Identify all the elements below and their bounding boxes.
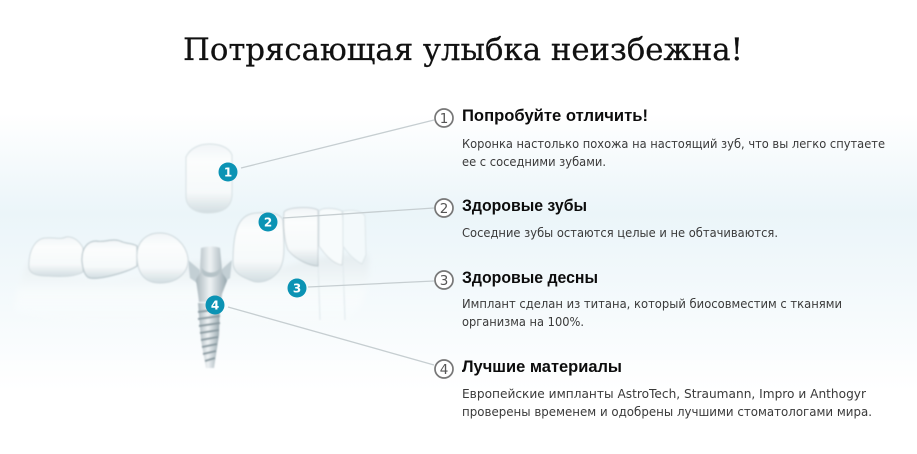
abutment	[196, 246, 227, 302]
item 1: Коронка настолько похожа на настоящий зуб, что вы легко спутаете	[462, 137, 885, 151]
badge 1	[218, 162, 238, 182]
badge 2	[258, 212, 278, 232]
item 2: Соседние зубы остаются целые и не обтачиваются.	[462, 226, 778, 240]
item 4: Лучшие материалы	[462, 358, 622, 376]
leader lines	[228, 120, 434, 365]
molar middle	[82, 240, 137, 278]
item 4: 4	[440, 362, 448, 378]
crown	[186, 144, 232, 213]
badge 2: 2	[264, 216, 272, 230]
gum shadows	[188, 260, 345, 320]
item 2: 2	[440, 201, 448, 217]
premolar	[137, 233, 188, 283]
item 1: ее с соседними зубами.	[462, 155, 606, 169]
illustration: dental implant and teeth	[15, 144, 369, 368]
gum	[15, 255, 369, 326]
item 3: Имплант сделан из титана, который биосовместим с тканями	[462, 297, 842, 311]
canine	[319, 208, 344, 265]
item 3	[435, 269, 842, 329]
badge 1: 1	[224, 166, 232, 180]
item 4	[435, 358, 872, 419]
incisor	[284, 208, 318, 266]
badge 3: 3	[293, 282, 301, 296]
item 3: организма на 100%.	[462, 315, 584, 329]
item 3: Здоровые десны	[462, 269, 598, 287]
item 2	[435, 197, 778, 240]
title: Потрясающая улыбка неизбежна!	[183, 32, 743, 68]
item 1: Попробуйте отличить!	[462, 107, 648, 125]
item 1: 1	[440, 111, 448, 127]
front tooth	[233, 213, 284, 282]
item 2: Здоровые зубы	[462, 197, 587, 215]
far tooth	[343, 210, 366, 264]
item 3: 3	[440, 273, 448, 289]
item 4: Европейские импланты AstroTech, Straumann, Impro и Anthogyr	[462, 387, 866, 401]
back teeth	[29, 208, 366, 283]
badge 3	[288, 278, 306, 298]
implant screw	[198, 303, 220, 368]
badge 4: 4	[211, 298, 219, 312]
molar left	[29, 237, 83, 277]
badge 4	[206, 296, 224, 314]
item 1	[435, 107, 885, 169]
item 4: проверены временем и одобрены лучшими стоматологами мира.	[462, 405, 872, 419]
